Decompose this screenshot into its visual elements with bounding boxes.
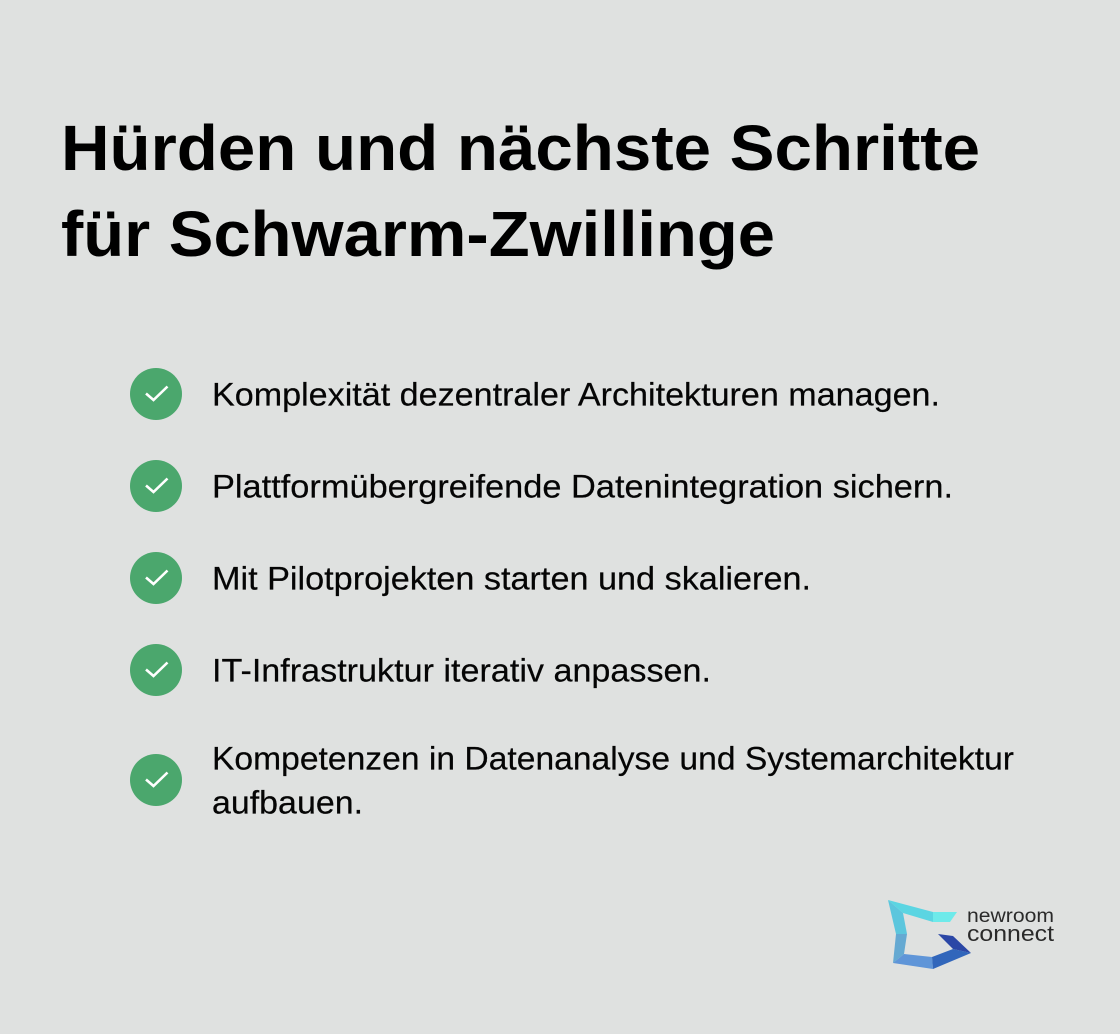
item 2: Plattformübergreifende Datenintegration sichern. (212, 468, 953, 504)
checklist (130, 368, 1014, 820)
item 4: IT-Infrastruktur iterativ anpassen. (212, 652, 711, 688)
wordmark: newroom (967, 906, 1054, 927)
item 1 (130, 368, 940, 420)
icon: logo mark (888, 900, 971, 969)
item 5: Kompetenzen in Datenanalyse und Systemarchitektur (212, 740, 1014, 776)
wordmark: connect (967, 921, 1054, 946)
item 5 (130, 740, 1014, 820)
wordmark (967, 906, 1054, 946)
logo: newroom connect (888, 900, 1054, 969)
title (61, 112, 980, 270)
item 1: Komplexität dezentraler Architekturen managen. (212, 376, 940, 412)
item 2 (130, 460, 953, 512)
item 5: aufbauen. (212, 784, 363, 820)
title: Hürden und nächste Schritte (61, 112, 980, 184)
item 3: Mit Pilotprojekten starten und skalieren. (212, 560, 811, 596)
item 3 (130, 552, 811, 604)
item 4 (130, 644, 711, 696)
title: für Schwarm-Zwillinge (61, 198, 775, 270)
